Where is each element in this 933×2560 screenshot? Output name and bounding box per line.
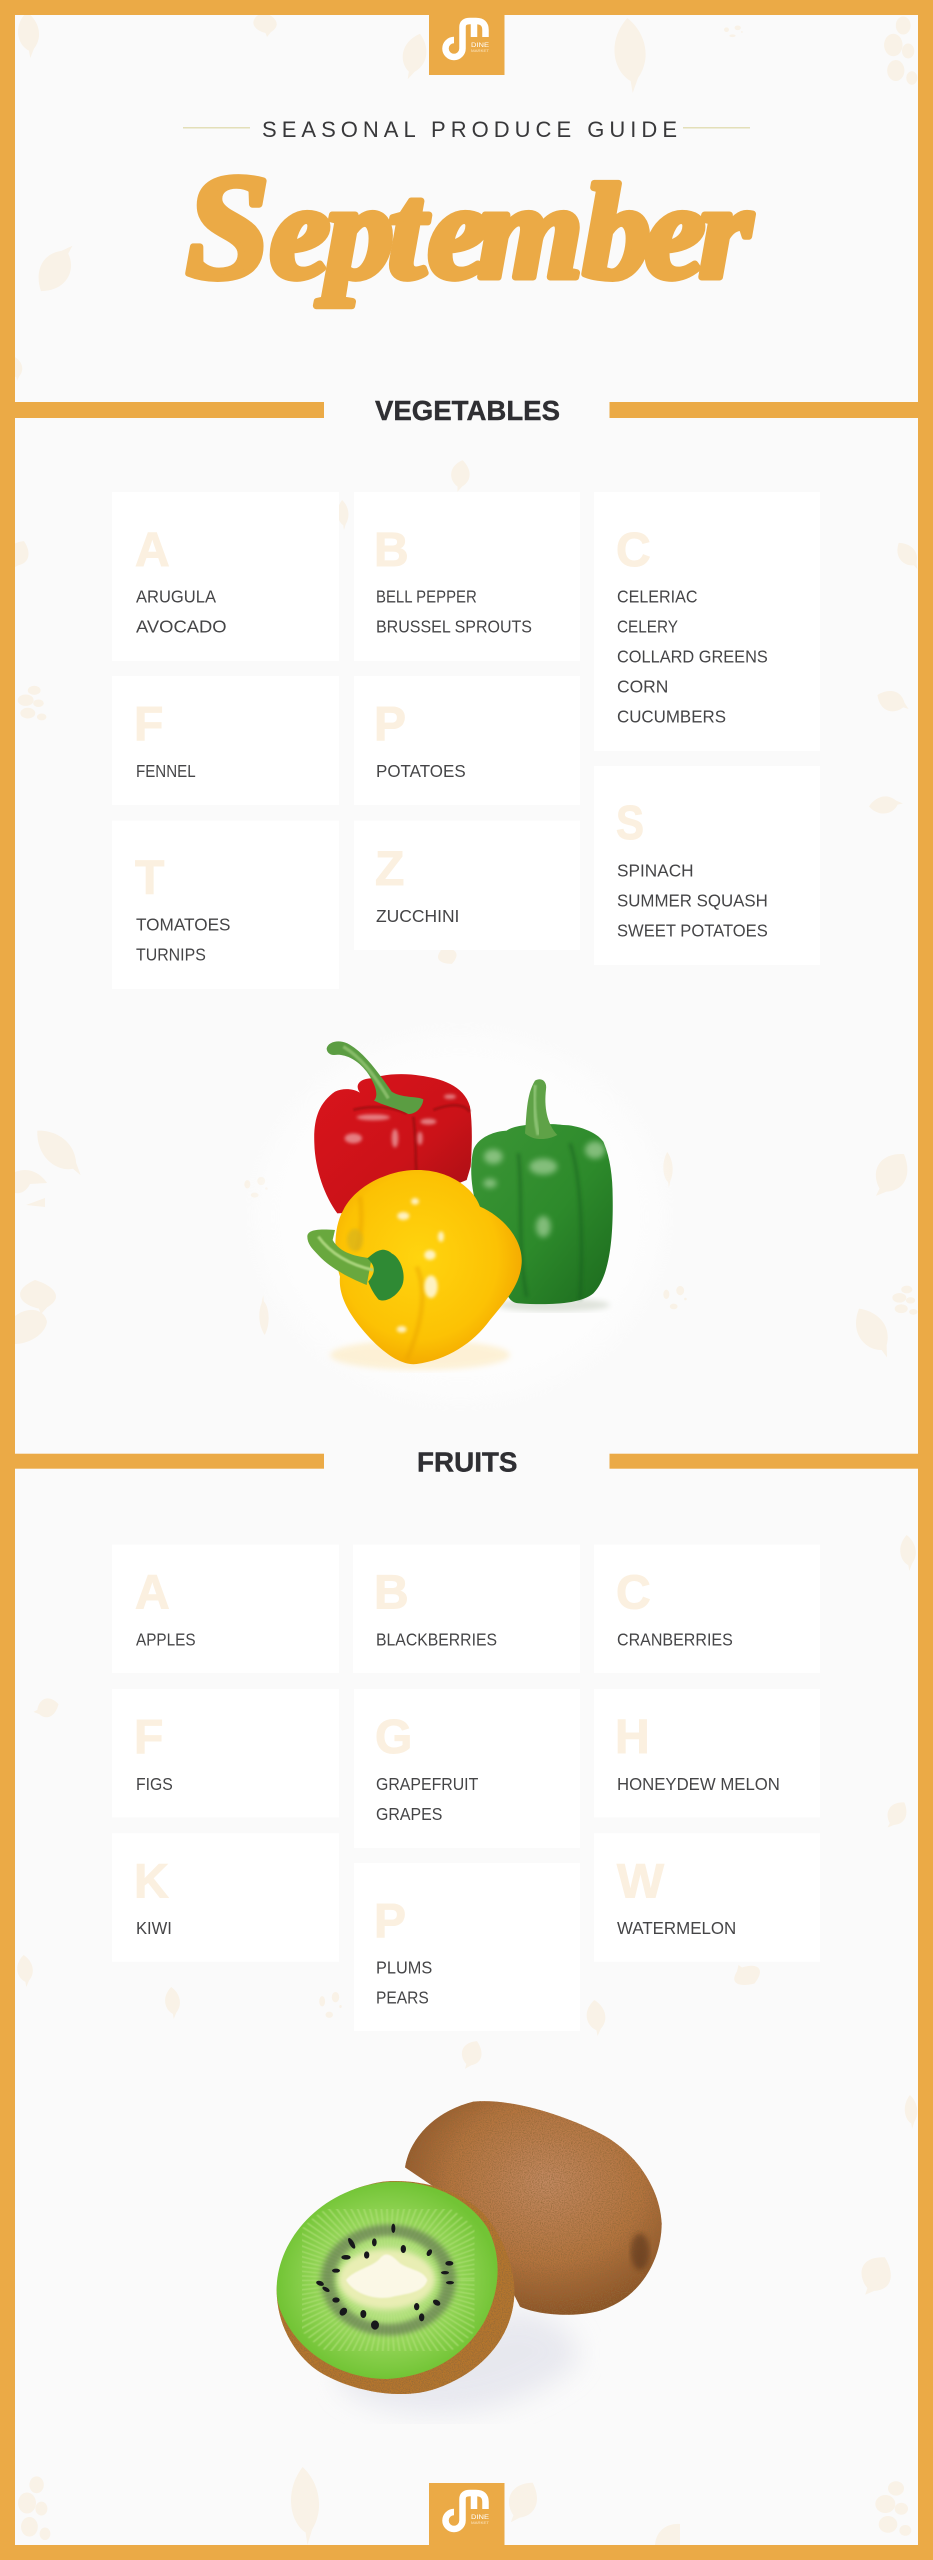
heading: vegetables xyxy=(15,395,918,426)
card: T: TOMATOES xyxy=(136,915,230,935)
card: H: HONEYDEW MELON xyxy=(617,1774,780,1794)
card: A: AVOCADO xyxy=(136,616,227,636)
card: C: C xyxy=(616,524,651,577)
card: Z xyxy=(354,820,580,950)
logo: bottom: DINE xyxy=(471,2514,490,2521)
card: G: GRAPEFRUIT xyxy=(376,1774,479,1794)
card: S: SUMMER SQUASH xyxy=(617,891,768,911)
logo: top: MARKET xyxy=(471,49,490,53)
title: September: e xyxy=(270,158,330,307)
whole kiwi xyxy=(405,2101,662,2315)
image: bell peppers xyxy=(260,1037,660,1397)
heading: fruits xyxy=(15,1446,918,1478)
title: September: e xyxy=(645,158,705,307)
card: B: BRUSSEL SPROUTS xyxy=(376,616,532,636)
card: A: APPLES xyxy=(136,1630,196,1650)
card: F xyxy=(112,1689,339,1818)
heading: fruits: FRUITS xyxy=(417,1446,518,1478)
card: B xyxy=(354,492,580,661)
green pepper xyxy=(471,1079,613,1304)
card: B: BELL PEPPER xyxy=(376,587,477,607)
card: A: A xyxy=(135,1567,170,1620)
card: B: BLACKBERRIES xyxy=(376,1630,497,1650)
card: P: POTATOES xyxy=(376,761,466,781)
card: P: P xyxy=(374,1895,406,1948)
card: K: K xyxy=(134,1855,169,1908)
card: B: B xyxy=(374,1567,409,1620)
card: C xyxy=(594,492,820,751)
half kiwi xyxy=(277,2181,514,2394)
card: C: COLLARD GREENS xyxy=(617,646,768,666)
logo: top: DINE xyxy=(471,42,490,49)
card: T: TURNIPS xyxy=(136,945,206,965)
card: K: KIWI xyxy=(136,1918,172,1938)
card: P: PLUMS xyxy=(376,1958,432,1978)
card: W xyxy=(594,1833,820,1962)
card: P: PEARS xyxy=(376,1987,429,2007)
card: P: P xyxy=(374,698,406,751)
logo: bottom: MARKET xyxy=(471,2521,490,2525)
card: W: WATERMELON xyxy=(617,1918,736,1938)
card: C: CRANBERRIES xyxy=(617,1630,733,1650)
red pepper xyxy=(314,1041,472,1213)
heading: vegetables: VEGETABLES xyxy=(375,395,560,426)
title: September: b xyxy=(583,158,650,307)
card: T xyxy=(112,820,339,989)
card: F: FENNEL xyxy=(136,761,196,781)
card: C: CORN xyxy=(617,677,668,697)
card: A: A xyxy=(135,524,170,577)
card: P xyxy=(354,1863,580,2031)
card: K xyxy=(112,1833,339,1962)
card: F: FIGS xyxy=(136,1774,173,1794)
card: P xyxy=(354,676,580,805)
card: H xyxy=(594,1689,820,1818)
card: Z: ZUCCHINI xyxy=(376,906,459,926)
card: C: C xyxy=(616,1567,651,1620)
title: September: S xyxy=(186,144,269,310)
card: F: F xyxy=(134,1711,163,1764)
card: B xyxy=(353,1545,580,1673)
card: S: S xyxy=(616,797,644,850)
card: C: CELERIAC xyxy=(617,587,698,607)
card: S: SWEET POTATOES xyxy=(617,921,768,941)
card: F: F xyxy=(134,698,163,751)
title: September xyxy=(186,144,753,310)
card: A xyxy=(112,1545,339,1673)
panel: vegetable cards xyxy=(112,492,820,989)
title: September: t xyxy=(388,158,429,307)
card: S xyxy=(594,766,820,965)
card: A xyxy=(112,492,339,661)
card: Z: Z xyxy=(375,843,404,896)
card: A: ARUGULA xyxy=(136,587,216,607)
header: seasonal produce guide: SEASONAL PRODUCE GUIDE xyxy=(262,117,677,142)
card: C xyxy=(594,1545,820,1673)
card: B: B xyxy=(374,524,409,577)
title: September: m xyxy=(478,158,583,307)
panel: fruit cards xyxy=(112,1545,820,2031)
image: kiwi xyxy=(277,2101,662,2413)
title: September: p xyxy=(316,158,394,307)
card: G: G xyxy=(375,1711,412,1764)
title: September: r xyxy=(699,158,753,307)
card: C: CUCUMBERS xyxy=(617,707,726,727)
title: September: e xyxy=(428,158,488,307)
card: S: SPINACH xyxy=(617,860,694,880)
card: G xyxy=(354,1689,580,1848)
card: W: W xyxy=(617,1855,665,1908)
logo: bottom xyxy=(429,2483,504,2548)
card: C: CELERY xyxy=(617,616,678,636)
card: G: GRAPES xyxy=(376,1804,442,1824)
logo: top xyxy=(429,10,504,75)
card: H: H xyxy=(615,1711,650,1764)
card: T: T xyxy=(135,852,164,905)
card: F xyxy=(112,676,339,805)
yellow pepper xyxy=(307,1170,522,1364)
